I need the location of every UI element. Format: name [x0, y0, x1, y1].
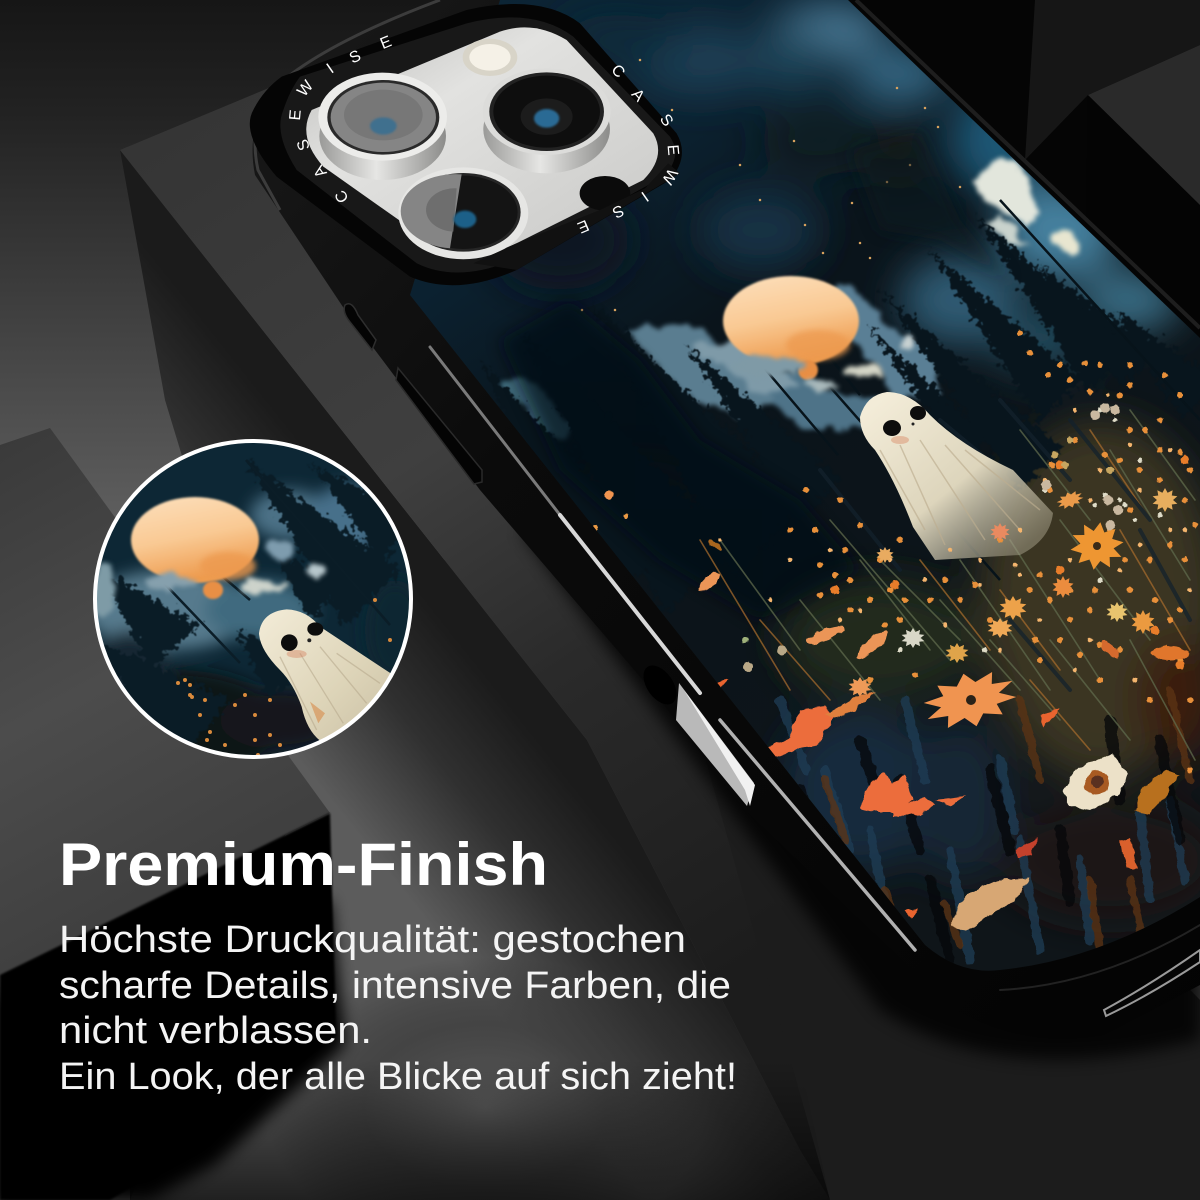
casewise ring lettering: I	[638, 188, 651, 204]
beige flower	[950, 878, 1030, 932]
circle clouds	[90, 541, 322, 616]
casewise ring lettering: S	[347, 47, 364, 67]
body text: scharfe Details, intensive Farben, die	[59, 965, 731, 1007]
body text: Höchste Druckqualität: gestochen	[59, 919, 686, 961]
elongated peach petals	[696, 538, 1188, 663]
wildflower dots	[595, 333, 1195, 770]
right edge line	[856, 0, 1200, 328]
clouds	[500, 285, 940, 440]
amber flower	[1135, 770, 1180, 815]
body text: nicht verblassen.	[59, 1010, 372, 1052]
heading: Premium-Finish	[59, 831, 548, 898]
phone shadow	[520, 500, 1200, 1059]
foreground clouds	[732, 334, 911, 392]
lower step front face	[0, 813, 336, 1200]
block front wall	[120, 150, 830, 1200]
flash	[463, 39, 517, 76]
casewise ring lettering: E	[664, 144, 681, 156]
bright cloud	[972, 160, 1080, 258]
tree trunks	[766, 199, 1118, 581]
lower black bezel	[473, 163, 680, 270]
upper left lens	[318, 73, 447, 180]
lens plate	[306, 27, 658, 254]
lower lens	[398, 167, 528, 259]
soft light on wall	[265, 957, 705, 1200]
meadow stems	[700, 400, 1195, 760]
casewise ring lettering	[287, 33, 681, 236]
orange daisies	[849, 488, 1177, 737]
circle moon	[131, 497, 259, 599]
body text: Ein Look, der alle Blicke auf sich zieht!	[59, 1056, 737, 1098]
lower step top surface	[0, 428, 330, 975]
stars	[582, 60, 960, 310]
right lower shading	[700, 740, 1200, 1200]
casewise ring lettering: E	[575, 216, 591, 236]
phone case body	[252, 0, 1200, 1039]
circle ghost	[259, 609, 391, 741]
white poppy	[1062, 754, 1128, 810]
casewise ring lettering: E	[378, 33, 394, 53]
ghost	[860, 392, 1053, 560]
casewise ring lettering: A	[310, 162, 331, 180]
side buttons	[344, 304, 482, 484]
far block top surface	[1088, 45, 1200, 205]
casewise ring lettering: E	[287, 109, 305, 121]
chrome edge highlight	[430, 347, 1200, 990]
circle flowers	[178, 600, 390, 755]
upper right lens	[483, 68, 611, 173]
casewise ring lettering: C	[607, 62, 628, 82]
bottom shading	[130, 1060, 830, 1200]
camera island	[250, 4, 682, 285]
lidar sensor	[580, 176, 630, 211]
casewise ring lettering: C	[332, 187, 353, 205]
forest silhouettes	[482, 218, 1177, 558]
circle trees	[104, 458, 400, 743]
zoom detail circle	[93, 439, 413, 759]
dark forest mass	[500, 300, 860, 620]
casewise ring lettering: I	[324, 61, 337, 77]
moon	[723, 276, 859, 380]
lettering band	[280, 17, 675, 273]
body text	[59, 919, 737, 1098]
artwork panel	[380, 0, 1200, 1000]
casewise ring lettering: S	[294, 137, 314, 153]
circle trunks	[163, 460, 390, 663]
casewise ring lettering: A	[628, 86, 648, 105]
casewise ring lettering: S	[656, 111, 676, 130]
casewise ring lettering: S	[610, 201, 626, 221]
paint strokes	[780, 690, 1190, 960]
charging port	[1104, 950, 1200, 1016]
upper right dark wall	[840, 0, 1200, 420]
phone	[250, 0, 1200, 1039]
casewise ring lettering: W	[658, 165, 680, 188]
glossy rim	[255, 0, 440, 210]
power button	[637, 660, 755, 806]
red poppies	[712, 680, 1138, 918]
casewise ring lettering: W	[294, 77, 318, 100]
lower step soft shadow	[0, 900, 345, 1200]
